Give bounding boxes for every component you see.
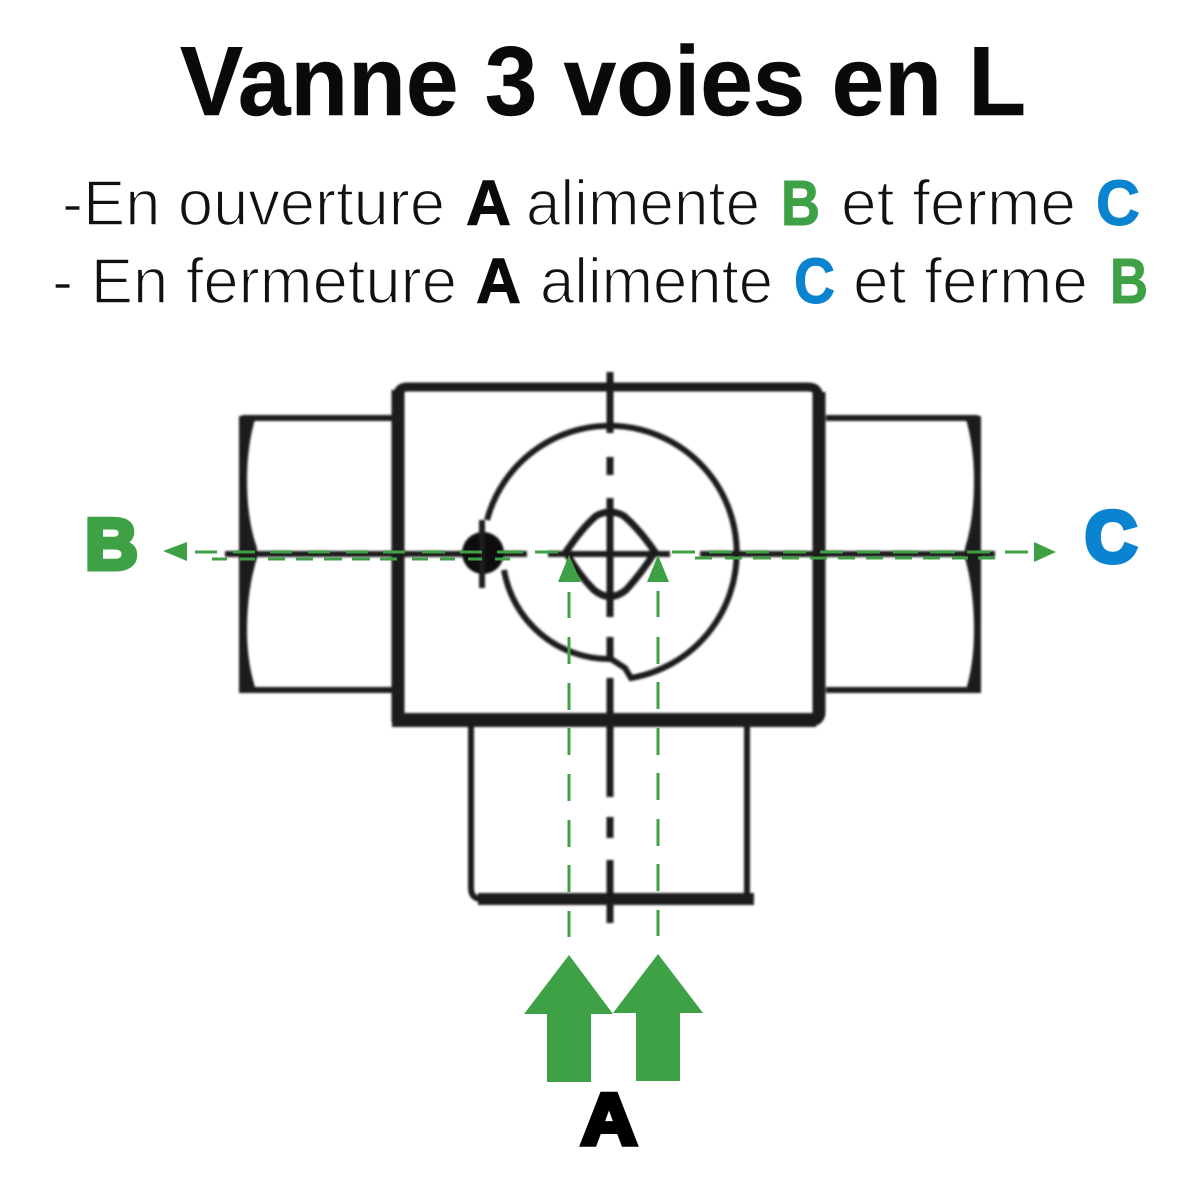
flow line from A left xyxy=(568,592,570,937)
text block: opening behaviour: B xyxy=(781,167,820,239)
icon: inlet arrow right xyxy=(613,954,703,1081)
stop pin xyxy=(462,520,504,588)
right port C xyxy=(826,416,981,693)
stem circle with notch xyxy=(487,426,737,678)
text block: closing behaviour: - En fermeture xyxy=(52,245,457,317)
valve technical drawing xyxy=(225,372,995,923)
flow line to C xyxy=(672,550,1028,554)
main valve body xyxy=(392,387,819,722)
bottom port A xyxy=(471,727,754,899)
label B: B xyxy=(85,505,138,585)
text block: closing behaviour xyxy=(52,245,1148,317)
icon: inlet arrow left xyxy=(524,955,613,1082)
flow line from A right xyxy=(656,591,660,936)
lower flow line to B xyxy=(212,558,510,560)
text block: opening behaviour: alimente xyxy=(526,167,760,239)
text block: opening behaviour xyxy=(62,167,1140,239)
centre axis vertical xyxy=(606,372,614,923)
title: Vanne 3 voies en L xyxy=(180,26,1026,136)
text block: closing behaviour: B xyxy=(1110,245,1148,317)
text block: opening behaviour: A xyxy=(466,167,511,239)
lower flow line to C xyxy=(695,556,995,560)
label A: A xyxy=(581,1080,637,1160)
text block: closing behaviour: alimente xyxy=(540,245,773,317)
label C: C xyxy=(1085,498,1137,578)
square stem xyxy=(566,512,655,596)
arrowheads on flow lines xyxy=(163,542,1056,582)
text block: closing behaviour: C xyxy=(794,245,835,317)
centre axis horizontal xyxy=(225,551,995,557)
green flow paths xyxy=(195,552,1028,937)
text block: opening behaviour: -En ouverture xyxy=(62,167,445,239)
text block: closing behaviour: et ferme xyxy=(853,245,1088,317)
text block: opening behaviour: et ferme xyxy=(841,167,1076,239)
left port B xyxy=(239,416,392,693)
text block: opening behaviour: C xyxy=(1096,167,1140,239)
flow line to B xyxy=(195,550,558,554)
text block: closing behaviour: A xyxy=(476,245,521,317)
